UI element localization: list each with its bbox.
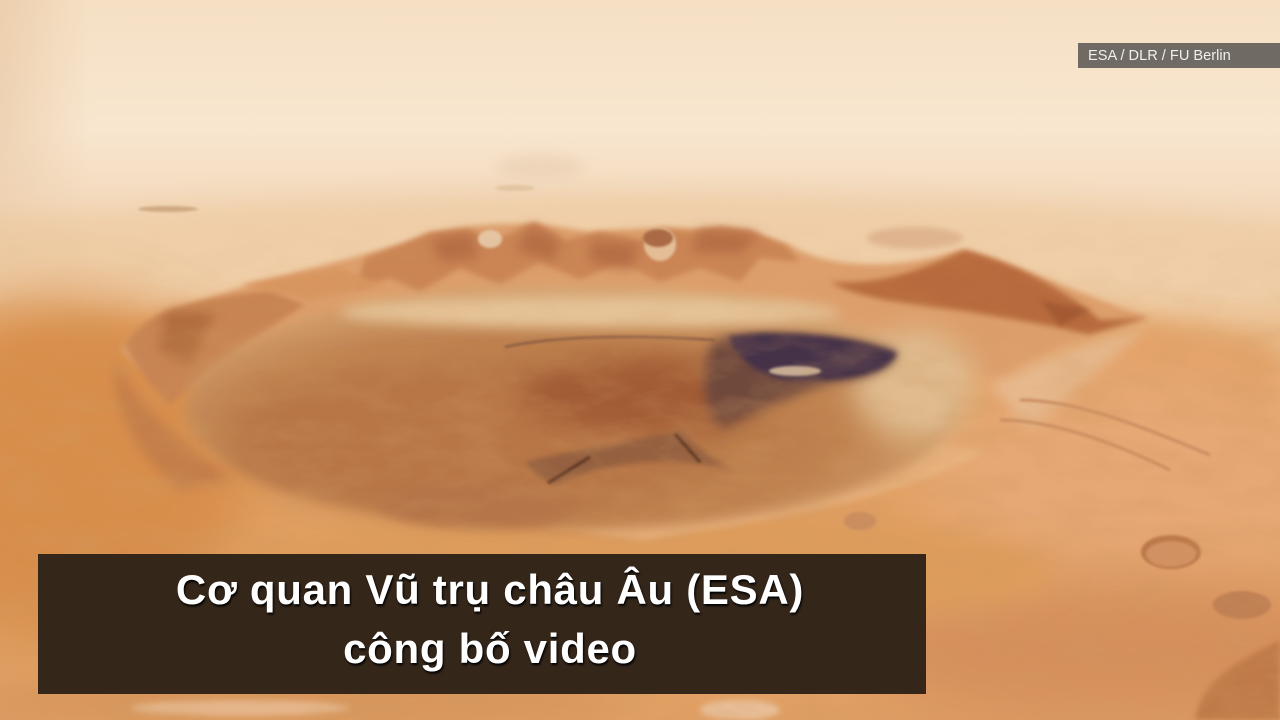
small impact craters <box>130 400 1280 720</box>
surrounding terrain <box>0 284 1280 720</box>
caption line 1: Cơ quan Vũ trụ châu Âu (ESA) <box>176 566 804 613</box>
credit label <box>1078 43 1280 68</box>
dark dune patch <box>505 333 897 485</box>
credit label: ESA / DLR / FU Berlin <box>1088 48 1231 64</box>
caption line 2: công bố video <box>343 625 637 672</box>
caption box <box>38 554 926 694</box>
distant hazy horizon <box>0 154 1280 332</box>
crater floor <box>185 286 975 530</box>
crater rim ridges <box>114 222 1150 540</box>
